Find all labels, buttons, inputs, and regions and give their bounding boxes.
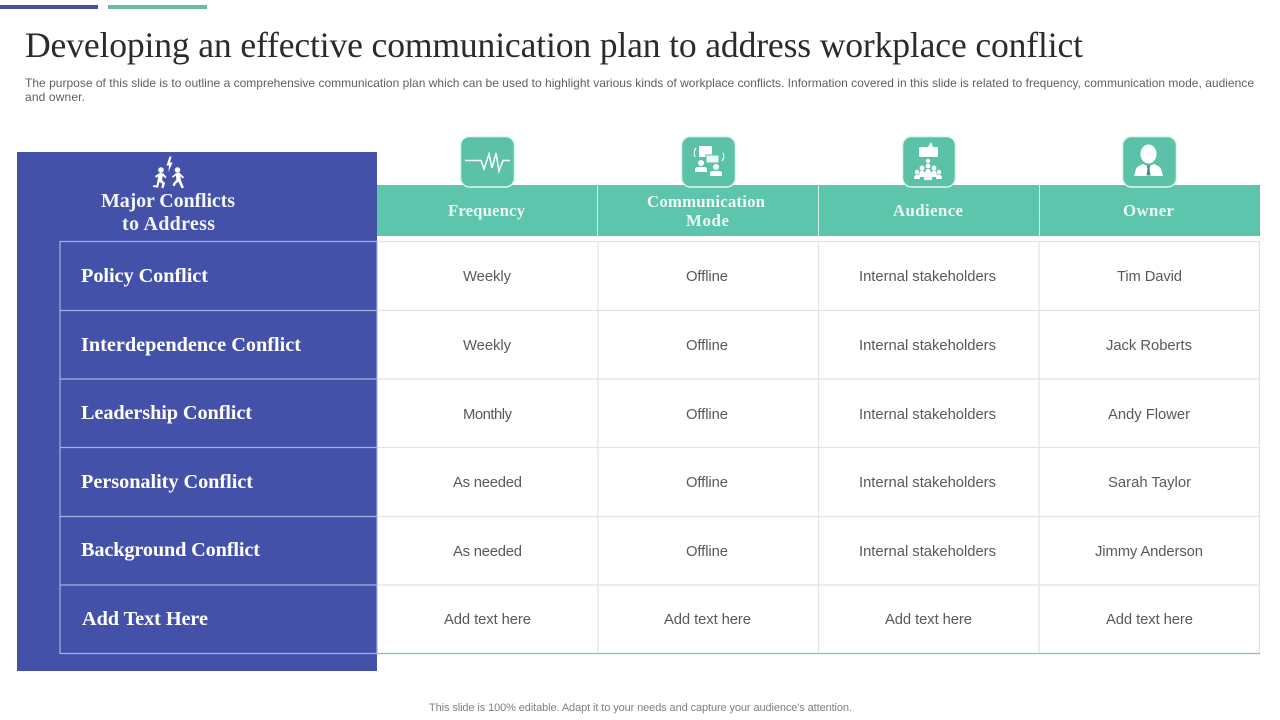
- row labels: Add Text Here: [82, 608, 208, 630]
- owner column values: Add text here: [1106, 612, 1193, 628]
- owner column values: Tim David: [1117, 269, 1182, 285]
- table grid: [377, 242, 1260, 654]
- owner column values: Jimmy Anderson: [1095, 544, 1203, 560]
- row labels: Personality Conflict: [81, 471, 253, 493]
- icon: frequency pulse: [460, 136, 514, 187]
- frequency column values: Weekly: [463, 269, 512, 285]
- communication mode column values: Offline: [686, 544, 728, 560]
- owner column values: Sarah Taylor: [1108, 475, 1191, 491]
- heading: major conflicts to address: to Address: [122, 213, 215, 235]
- frequency column values: Monthly: [463, 407, 513, 423]
- frequency column values: As needed: [453, 544, 522, 560]
- frequency column values: [444, 269, 531, 628]
- owner column values: Jack Roberts: [1106, 338, 1192, 354]
- communication mode column values: Offline: [686, 475, 728, 491]
- audience column values: Internal stakeholders: [859, 544, 996, 560]
- row labels: Policy Conflict: [81, 265, 208, 287]
- panel: teal header band: [377, 185, 1260, 236]
- communication mode column values: Offline: [686, 407, 728, 423]
- row labels: Interdependence Conflict: [81, 334, 301, 356]
- column headings: Owner: [1123, 201, 1175, 220]
- audience column values: [859, 269, 996, 628]
- communication mode column values: [664, 269, 751, 628]
- frequency column values: As needed: [453, 475, 522, 491]
- audience column values: Internal stakeholders: [859, 269, 996, 285]
- column headings: Audience: [893, 201, 964, 220]
- audience column values: Add text here: [885, 612, 972, 628]
- owner column values: Andy Flower: [1108, 407, 1190, 423]
- audience column values: Internal stakeholders: [859, 407, 996, 423]
- communication mode column values: Offline: [686, 338, 728, 354]
- frequency column values: Weekly: [463, 338, 512, 354]
- owner column values: [1095, 269, 1203, 628]
- column headings: Communication: [647, 192, 766, 211]
- description text: and owner.: [25, 90, 85, 104]
- top accent bars: [0, 5, 207, 9]
- audience column values: Internal stakeholders: [859, 475, 996, 491]
- frequency column values: Add text here: [444, 612, 531, 628]
- row labels: Leadership Conflict: [81, 402, 252, 424]
- panel: major conflicts column background: [17, 152, 377, 671]
- icon: audience: [902, 136, 956, 187]
- row labels: Background Conflict: [81, 539, 260, 561]
- communication mode column values: Offline: [686, 269, 728, 285]
- column headings: Frequency: [448, 201, 526, 220]
- column headings: [448, 192, 1175, 230]
- heading: major conflicts to address: Major Conflicts: [101, 190, 235, 212]
- footer note: This slide is 100% editable. Adapt it to your needs and capture your audience's attention.: [429, 702, 852, 714]
- row label grid: [60, 242, 377, 654]
- icon: communication mode: [682, 136, 736, 187]
- row labels: [81, 265, 301, 630]
- heading: major conflicts to address: [101, 190, 235, 235]
- column headings: Mode: [686, 211, 730, 230]
- icon: two people in conflict with lightning bolt: [153, 156, 184, 188]
- description text: [25, 76, 1254, 104]
- icon: owner: [1122, 136, 1176, 187]
- title: Developing an effective communication plan to address workplace conflict: [25, 25, 1083, 65]
- audience column values: Internal stakeholders: [859, 338, 996, 354]
- description text: The purpose of this slide is to outline a comprehensive communication plan which can be used to highlight various kinds of workplace conflicts. Information covered in this slide is related to frequency, communication mode, audience: [25, 76, 1254, 90]
- communication mode column values: Add text here: [664, 612, 751, 628]
